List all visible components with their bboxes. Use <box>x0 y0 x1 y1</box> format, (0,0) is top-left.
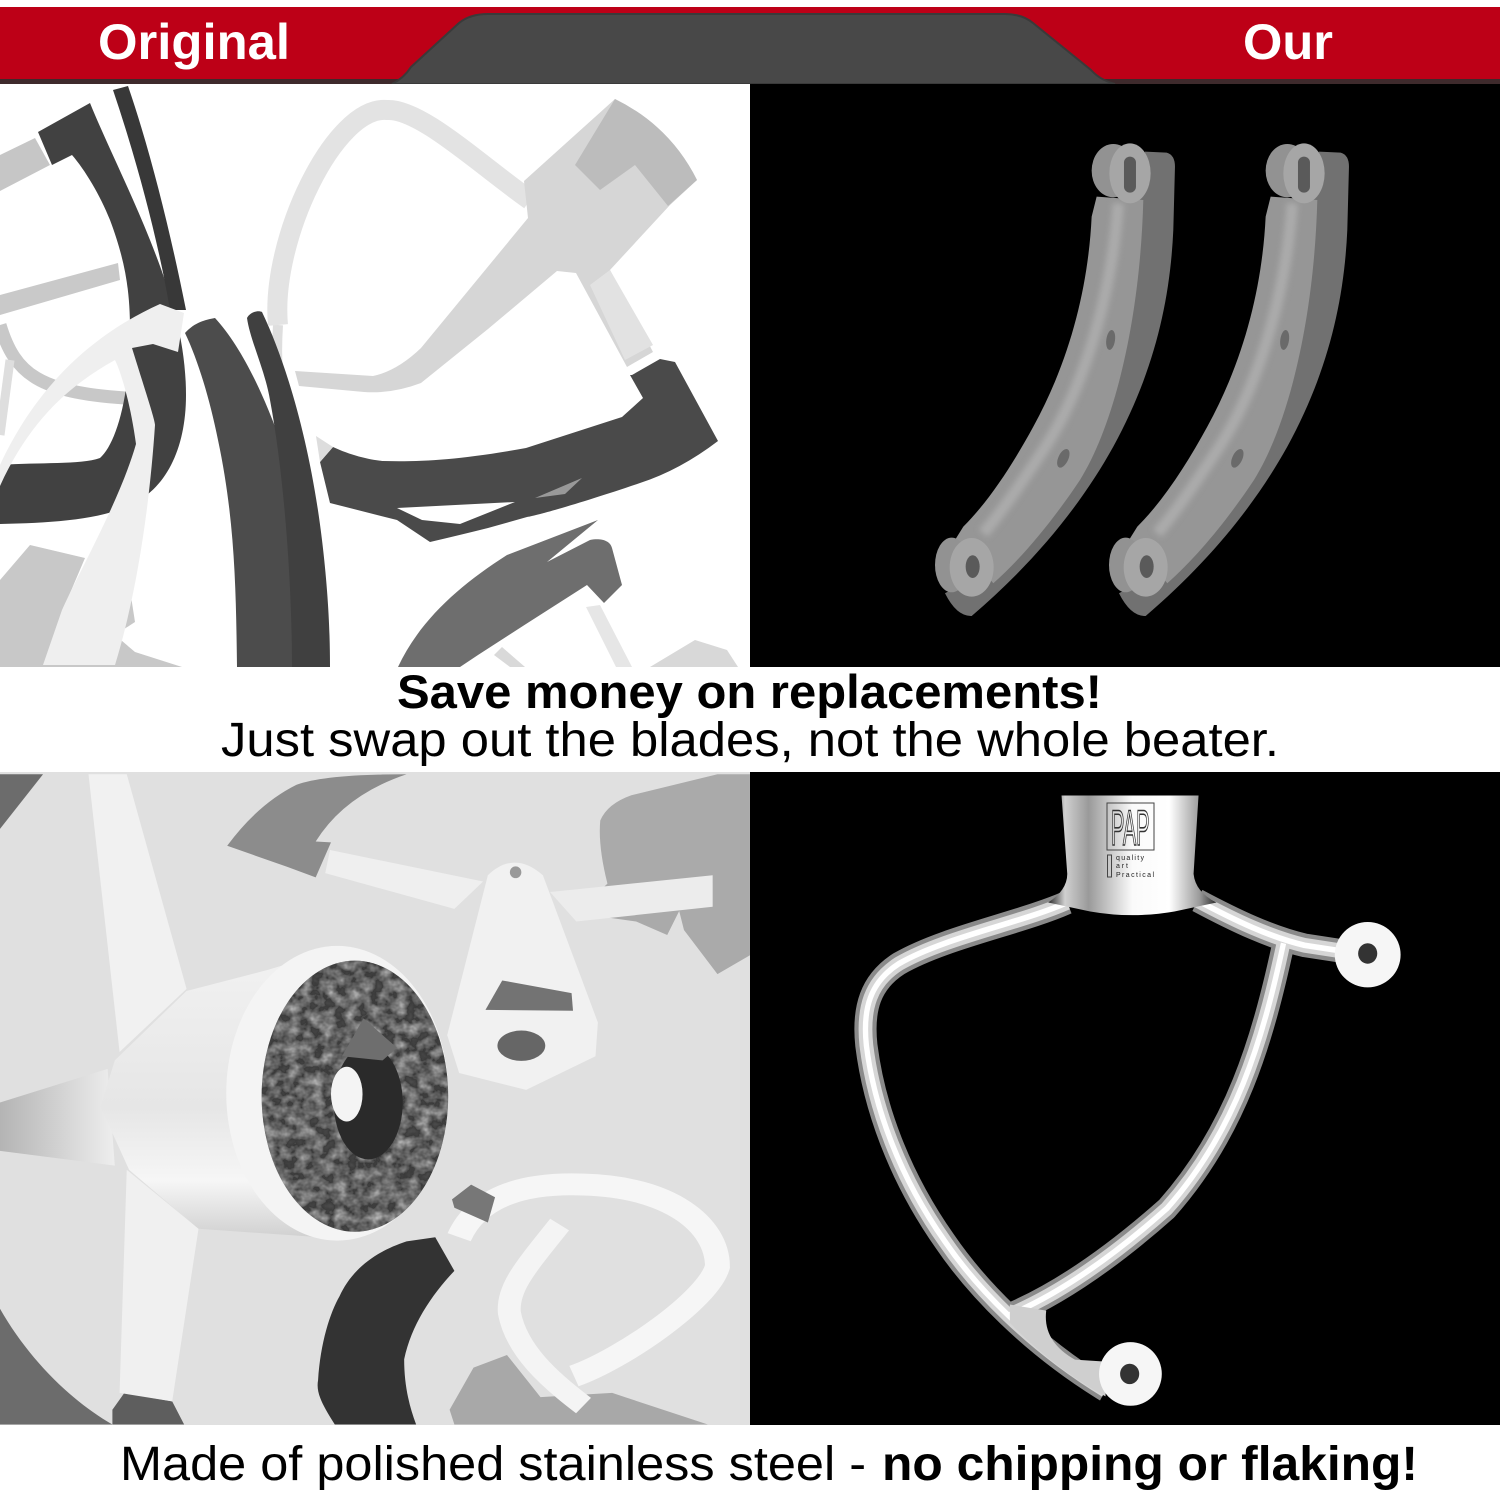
beater frame <box>865 900 1366 1390</box>
far left torn blade <box>0 86 186 524</box>
bottom mounting lug <box>1099 1342 1162 1406</box>
beater with hand <box>227 774 750 1090</box>
white beater front <box>0 304 184 665</box>
caption subline: Just swap out the blades, not the whole beater. <box>221 714 1279 767</box>
middle caption <box>221 665 1279 767</box>
panel: stainless steel beater <box>750 772 1500 1425</box>
panel: chipped coating on original beater <box>0 772 750 1425</box>
icon: right blade <box>1109 143 1349 616</box>
lower right worn blade <box>398 520 738 667</box>
icon: left blade <box>935 143 1175 616</box>
logo: PAP quality art practical <box>1107 802 1154 879</box>
heading: Original: Original <box>98 14 290 70</box>
grey beater wire behind blades <box>277 325 290 440</box>
panel: worn original blades <box>0 84 750 667</box>
far left beater wires <box>0 138 125 435</box>
panel: replacement blades <box>750 84 1500 667</box>
beater hub <box>1048 796 1217 915</box>
background blade corners <box>0 774 184 1424</box>
rusted end of beater <box>226 946 448 1241</box>
chipped beater with dark blade <box>318 1184 717 1424</box>
caption regular part: Made of polished stainless steel - <box>120 1438 866 1491</box>
logo: PAP quality art practical: quality <box>1116 855 1144 862</box>
right mounting lug <box>1335 922 1401 987</box>
grey beater <box>277 99 697 392</box>
caption headline: Save money on replacements! <box>397 665 1102 718</box>
logo: PAP quality art practical: PAP <box>1111 802 1150 857</box>
hand holding white beater <box>0 545 182 667</box>
detached blade strips <box>185 311 330 667</box>
logo: PAP quality art practical: Practical <box>1116 872 1154 879</box>
logo: PAP quality art practical: art <box>1116 863 1128 870</box>
large beater body <box>0 774 349 1401</box>
lower frame junction <box>1010 1305 1106 1396</box>
header centre tab <box>392 14 1115 84</box>
header banner <box>0 7 1500 84</box>
main damaged blade <box>316 359 718 542</box>
caption bold part: no chipping or flaking! <box>882 1438 1418 1491</box>
bottom caption <box>120 1438 1418 1491</box>
heading: Our: Our <box>1243 14 1333 70</box>
